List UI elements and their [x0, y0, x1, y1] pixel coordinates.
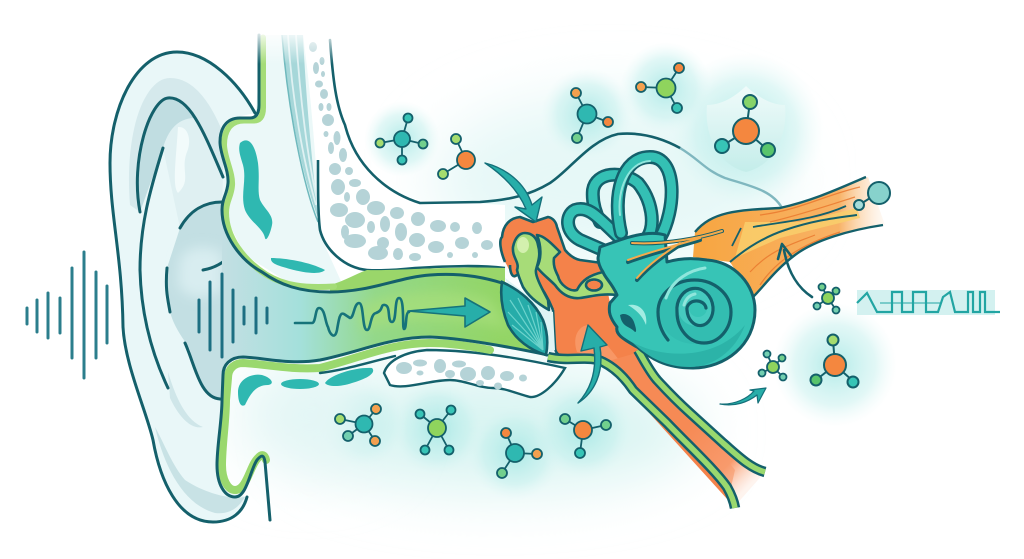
cochlea spiral [658, 280, 731, 343]
molecule [416, 406, 456, 454]
tissue below the canal [235, 360, 385, 470]
orange highlight [575, 325, 650, 402]
helix shade [129, 78, 224, 212]
inner helix fill [138, 98, 223, 228]
molecule [810, 334, 858, 388]
molecule and nerve end [854, 182, 890, 210]
middle ear: orange [500, 217, 735, 500]
nerve fibres entering cochlea [628, 231, 722, 280]
arrow: small curved [720, 388, 766, 405]
eardrum [501, 282, 547, 355]
semicircular canals [568, 157, 672, 250]
molecule [560, 414, 611, 458]
molecule [758, 350, 786, 380]
molecule [636, 63, 684, 113]
bone: lower [384, 350, 565, 397]
soft tissue glow [300, 42, 897, 501]
arrow in canal [408, 298, 490, 327]
outer ear [110, 52, 255, 522]
lower canal wall [217, 337, 548, 520]
top fade [245, 28, 345, 64]
ear outlines [110, 52, 255, 522]
molecule [497, 428, 542, 478]
concha [166, 202, 226, 399]
sound wave: outside ear [27, 252, 107, 378]
molecule [376, 114, 428, 164]
cochlea [598, 233, 755, 368]
green upper canal band [330, 268, 505, 292]
digital signal [857, 290, 1000, 315]
sound wave: in canal [199, 274, 267, 357]
arrow: to middle ear [485, 163, 542, 222]
arrow: up to middle ear [578, 325, 607, 403]
ossicles [513, 233, 617, 310]
molecule [814, 284, 840, 314]
wave line in canal [295, 298, 409, 336]
upper canal wall [220, 35, 502, 292]
shield with molecule [707, 86, 785, 172]
bone: upper [282, 35, 782, 270]
arrow: to nerve [778, 244, 812, 297]
molecule [571, 88, 613, 143]
molecule [438, 134, 475, 179]
gap beside eardrum [505, 278, 555, 355]
ear canal fill [222, 210, 548, 399]
molecule [335, 404, 381, 446]
nerve bundle [693, 177, 885, 297]
cochlea shading [632, 325, 745, 367]
tissue around the canal [222, 35, 345, 290]
lobe shading [155, 427, 245, 513]
canal light band [360, 292, 510, 330]
auditory tube [548, 350, 765, 508]
teal tissue patches [238, 140, 373, 406]
